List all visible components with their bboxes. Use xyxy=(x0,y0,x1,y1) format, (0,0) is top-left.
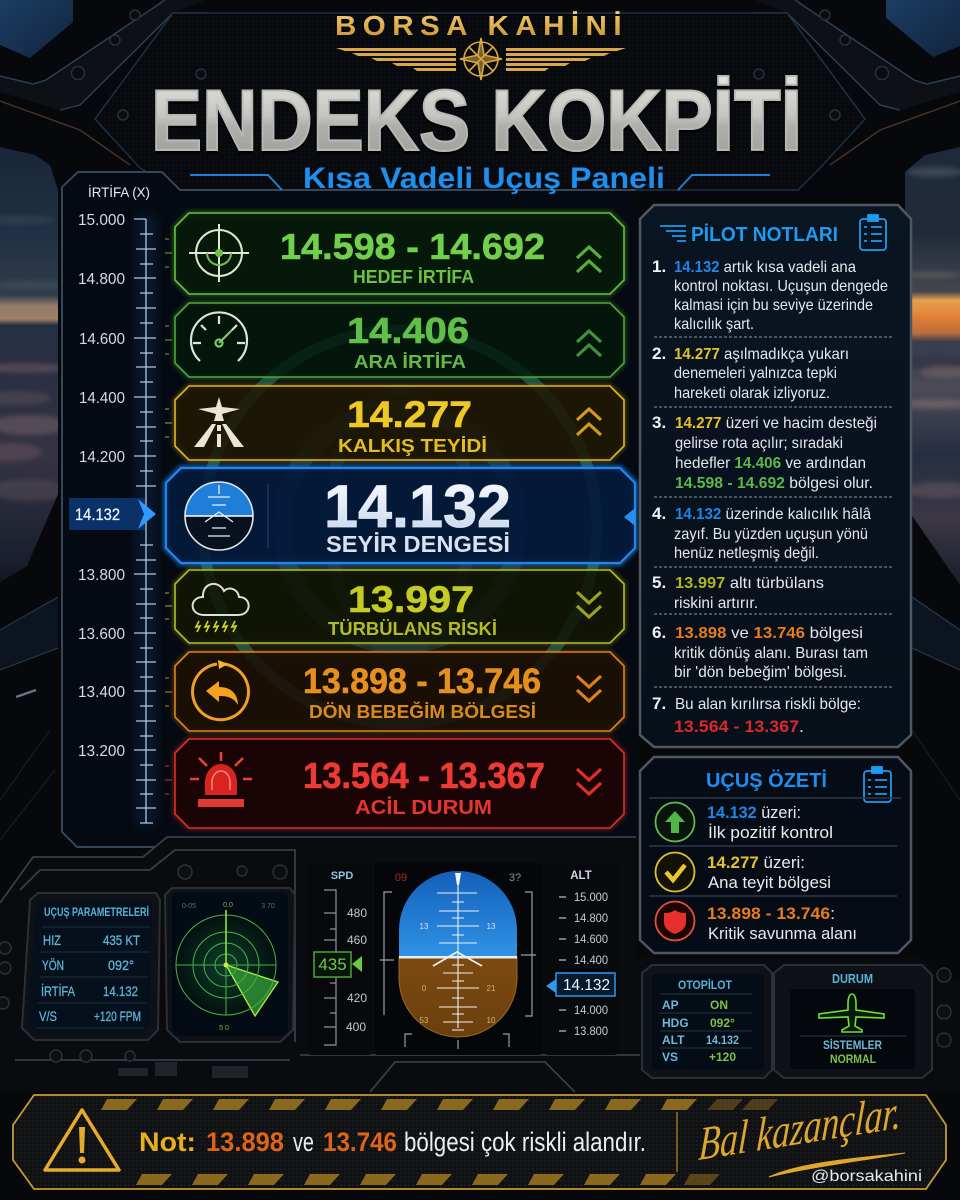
console frame xyxy=(0,837,960,1092)
scale labels: 13.200 xyxy=(78,743,125,760)
altitude tape: 14.132 xyxy=(563,977,610,994)
icon: chevrons down xyxy=(577,676,601,701)
bar: ara irtifa xyxy=(165,303,624,377)
row: positive control: 14.132 üzeri: xyxy=(707,803,801,822)
attitude display: 0 xyxy=(422,984,427,993)
note 5: riskini artırır. xyxy=(674,595,758,612)
note text: 13.898 xyxy=(206,1127,284,1157)
row: defence xyxy=(656,902,857,943)
bar: hedef irtifa xyxy=(165,213,624,294)
heading: OTOPİLOT xyxy=(678,977,733,992)
row: confirmation: 14.277 üzeri: xyxy=(707,853,805,872)
table rows: İRTİFA xyxy=(41,982,76,999)
table rows: HIZ xyxy=(43,932,61,948)
icon: clipboard xyxy=(860,215,886,250)
frame plates xyxy=(0,0,960,670)
note 2 xyxy=(652,344,849,402)
panel: primary flight display xyxy=(307,863,618,1055)
panel: radar: 0.0 xyxy=(223,902,233,909)
scale labels: 14.800 xyxy=(78,271,125,288)
note text xyxy=(139,1127,646,1157)
note 4: 4. xyxy=(652,504,666,523)
scale labels xyxy=(78,212,125,760)
altitude tape: 14.600 xyxy=(574,932,608,946)
note 2: denemeleri yalnızca tepki xyxy=(674,365,837,382)
note 3: hedefler 14.406 ve ardından xyxy=(675,455,866,472)
table rows: HDG xyxy=(662,1016,689,1030)
speed tape: 420 xyxy=(347,991,367,1005)
table rows: VS xyxy=(662,1050,678,1064)
speed tape: SPD xyxy=(331,870,353,882)
icon: clipboard xyxy=(864,767,891,802)
attitude display: 21 xyxy=(487,984,496,993)
bar: seyir dengesi xyxy=(166,468,635,563)
table rows xyxy=(39,932,141,1024)
panel: otopilot xyxy=(642,965,772,1078)
attitude display: 53 xyxy=(420,1016,429,1025)
table rows: YÖN xyxy=(42,956,64,973)
note 1: 1. xyxy=(652,257,666,276)
row: positive control: İlk pozitif kontrol xyxy=(708,823,833,842)
note text: 13.746 xyxy=(323,1127,397,1157)
bar: kalkis teyidi xyxy=(165,386,624,460)
table rows: 14.132 xyxy=(706,1033,739,1047)
note text: bölgesi çok riskli alandır. xyxy=(404,1127,646,1157)
heading: PİLOT NOTLARI xyxy=(691,223,838,246)
speed tape xyxy=(307,863,372,1055)
note 7: Bu alan kırılırsa riskli bölge: xyxy=(675,696,861,713)
icon: target xyxy=(189,224,249,282)
altitude tape: 13.800 xyxy=(574,1024,608,1038)
table rows: +120 xyxy=(709,1050,736,1064)
icon: attitude indicator xyxy=(185,482,253,550)
icon: gauge xyxy=(191,312,247,361)
bar: acil durum: ACİL DURUM xyxy=(355,796,492,819)
handle: @borsakahini xyxy=(811,1168,922,1185)
note 4: henüz netleşmiş değil. xyxy=(674,545,819,562)
table rows: V/S xyxy=(39,1008,57,1024)
table rows: 435 KT xyxy=(103,932,140,948)
footer banner xyxy=(13,1087,946,1189)
note text: ve xyxy=(293,1127,314,1157)
axis title: İRTİFA (X) xyxy=(88,183,150,200)
bar: turbulans riski xyxy=(165,570,624,643)
panel: radar: 5 0 xyxy=(219,1025,229,1032)
radar grid xyxy=(176,915,276,1015)
icon: chevrons down xyxy=(577,769,601,794)
note 3: 14.598 - 14.692 bölgesi olur. xyxy=(675,475,873,492)
title: ENDEKS KOKPİTİ xyxy=(151,73,802,169)
panel: ucus parametreleri xyxy=(22,893,160,1040)
scale labels: 13.400 xyxy=(78,684,125,701)
row: positive control xyxy=(656,802,833,842)
altitude tape: ALT xyxy=(570,870,592,882)
icon: speed lines xyxy=(660,226,686,241)
logo: Borsa Kahini xyxy=(335,10,628,80)
speed tape: 480 xyxy=(347,906,367,920)
note 2: 2. xyxy=(652,344,666,363)
note 6 xyxy=(652,623,868,681)
icon: right marker xyxy=(624,508,635,526)
note 5: 5. xyxy=(652,573,666,592)
note 7: 13.564 - 13.367 . xyxy=(674,717,804,736)
altitude tape: 14.800 xyxy=(574,911,608,925)
attitude display: 13 xyxy=(487,922,496,931)
bar: turbulans riski: TÜRBÜLANS RİSKİ xyxy=(328,618,497,639)
table rows xyxy=(662,998,739,1064)
panel: durum: NORMAL xyxy=(830,1052,876,1066)
radar sweep xyxy=(226,965,278,1016)
bar: acil durum xyxy=(165,739,624,828)
bar: kalkis teyidi: 14.277 xyxy=(347,394,472,435)
icon: return arrow xyxy=(192,660,248,720)
table rows: ON xyxy=(710,998,728,1012)
bar: don bebegim bolgesi xyxy=(165,652,624,731)
altitude tape xyxy=(544,863,618,1055)
bar: hedef irtifa: 14.598 - 14.692 xyxy=(280,226,545,267)
note 6: 6. xyxy=(652,623,666,642)
panel: durum xyxy=(774,965,932,1078)
bar: ara irtifa: ARA İRTİFA xyxy=(354,351,466,372)
altitude tape: 15.000 xyxy=(574,890,608,904)
note 3: 14.277 üzeri ve hacim desteği xyxy=(675,415,877,432)
bar: seyir dengesi: SEYİR DENGESİ xyxy=(326,531,510,557)
note 2: 14.277 aşılmadıkça yukarı xyxy=(674,346,849,363)
attitude display: 3? xyxy=(509,872,521,884)
bar: don bebegim bolgesi: DÖN BEBEĞİM BÖLGESİ xyxy=(309,701,536,722)
note 1: kontrol noktası. Uçuşun dengede xyxy=(674,278,888,295)
note 1 xyxy=(652,257,888,333)
table rows: ALT xyxy=(662,1033,685,1047)
icon: chevrons up xyxy=(577,409,601,435)
table rows: 092° xyxy=(710,1016,735,1030)
icon: plane status xyxy=(819,994,884,1032)
note 2: hareketi olarak izliyoruz. xyxy=(674,385,830,402)
bar: ara irtifa: 14.406 xyxy=(347,310,469,351)
scale labels: 14.600 xyxy=(79,331,125,348)
note 7 xyxy=(652,694,861,736)
note 5 xyxy=(652,573,824,612)
note 4: zayıf. Bu yüzden uçuşun yönü xyxy=(674,526,868,543)
scale labels: 13.800 xyxy=(78,567,125,584)
attitude display xyxy=(374,863,542,1055)
attitude display: 10 xyxy=(487,1016,496,1025)
note 3 xyxy=(652,413,877,492)
signature: Bal kazançlar. xyxy=(697,1087,903,1171)
note 1: 14.132 artık kısa vadeli ana xyxy=(674,259,856,276)
speed tape: 400 xyxy=(346,1020,366,1034)
note 6: bir 'dön bebeğim' bölgesi. xyxy=(674,664,847,681)
table rows: 14.132 xyxy=(103,983,138,999)
attitude display: 09 xyxy=(395,872,407,884)
row: confirmation: Ana teyit bölgesi xyxy=(708,873,831,892)
table rows: AP xyxy=(662,998,679,1012)
hazard stripes xyxy=(101,1099,778,1185)
scale labels: 14.200 xyxy=(79,449,125,466)
bar: turbulans riski: 13.997 xyxy=(348,579,474,620)
panel: ucus ozeti xyxy=(640,757,911,953)
logo: Borsa Kahini: BORSA KAHİNİ xyxy=(335,10,628,41)
current level marker xyxy=(69,498,156,530)
note 4 xyxy=(652,504,871,562)
attitude display: 13 xyxy=(420,922,429,931)
speed tape: 435 xyxy=(318,955,347,974)
icon: storm cloud xyxy=(193,584,249,632)
header carbon panel xyxy=(95,13,865,190)
altitude tape: 14.000 xyxy=(574,1003,608,1017)
note 1: kalıcılık şart. xyxy=(674,316,754,333)
row: confirmation xyxy=(656,852,831,892)
speed tape: 460 xyxy=(347,933,367,947)
note 3: 3. xyxy=(652,413,666,432)
panel: altitude ladder xyxy=(62,172,636,847)
watermark ring xyxy=(203,330,597,724)
panel: radar xyxy=(165,888,295,1042)
note 3: gelirse rota açılır; sıradaki xyxy=(675,435,843,452)
bar: kalkis teyidi: KALKIŞ TEYİDİ xyxy=(338,435,487,456)
note 6: 13.898 ve 13.746 bölgesi xyxy=(675,625,863,642)
logo wings xyxy=(336,48,626,71)
scale ticks xyxy=(134,219,156,823)
background: cockpit xyxy=(0,0,960,840)
axis glow xyxy=(136,215,156,825)
altitude tape: 14.400 xyxy=(574,953,608,967)
note 7: 7. xyxy=(652,694,666,713)
subtitle xyxy=(190,162,770,195)
panel: radar: 0-05 xyxy=(182,903,196,910)
bar: hedef irtifa: HEDEF İRTİFA xyxy=(353,266,474,287)
note 5: 13.997 altı türbülans xyxy=(675,575,824,592)
bar: acil durum: 13.564 - 13.367 xyxy=(303,755,545,796)
table rows: +120 FPM xyxy=(94,1008,141,1024)
window: top left xyxy=(0,0,73,58)
panel: durum: DURUM xyxy=(832,972,873,986)
panel: pilot notlari xyxy=(640,205,911,747)
panel: radar: 3 70 xyxy=(261,903,275,910)
heading: UÇUŞ PARAMETRELERİ xyxy=(44,906,149,919)
bar: seyir dengesi: 14.132 xyxy=(324,473,511,540)
current level marker: 14.132 xyxy=(75,505,120,524)
icon: chevrons up xyxy=(577,331,601,356)
scale labels: 13.600 xyxy=(78,626,125,643)
row: defence: 13.898 - 13.746: xyxy=(707,904,835,923)
icon: alarm beacon xyxy=(190,752,252,807)
panel: durum: SİSTEMLER xyxy=(823,1037,882,1052)
heading: UÇUŞ ÖZETİ xyxy=(706,769,827,792)
note 1: kalmasi için bu seviye üzerinde xyxy=(674,297,873,314)
logo compass xyxy=(460,38,502,80)
icon: warning triangle xyxy=(45,1110,119,1170)
scale labels: 15.000 xyxy=(78,212,125,229)
icon: chevrons up xyxy=(577,247,601,272)
table rows: 092° xyxy=(108,957,134,973)
note text: Not: xyxy=(139,1127,196,1157)
icon: plane and runway xyxy=(194,397,244,447)
note 4: 14.132 üzerinde kalıcılık hâlâ xyxy=(675,506,871,523)
bar: don bebegim bolgesi: 13.898 - 13.746 xyxy=(303,662,541,701)
subtitle: Kısa Vadeli Uçuş Paneli xyxy=(303,162,665,195)
row: defence: Kritik savunma alanı xyxy=(708,924,857,943)
note 6: kritik dönüş alanı. Burası tam xyxy=(674,645,868,662)
scale labels: 14.400 xyxy=(79,390,125,407)
icon: chevrons down xyxy=(577,592,601,617)
